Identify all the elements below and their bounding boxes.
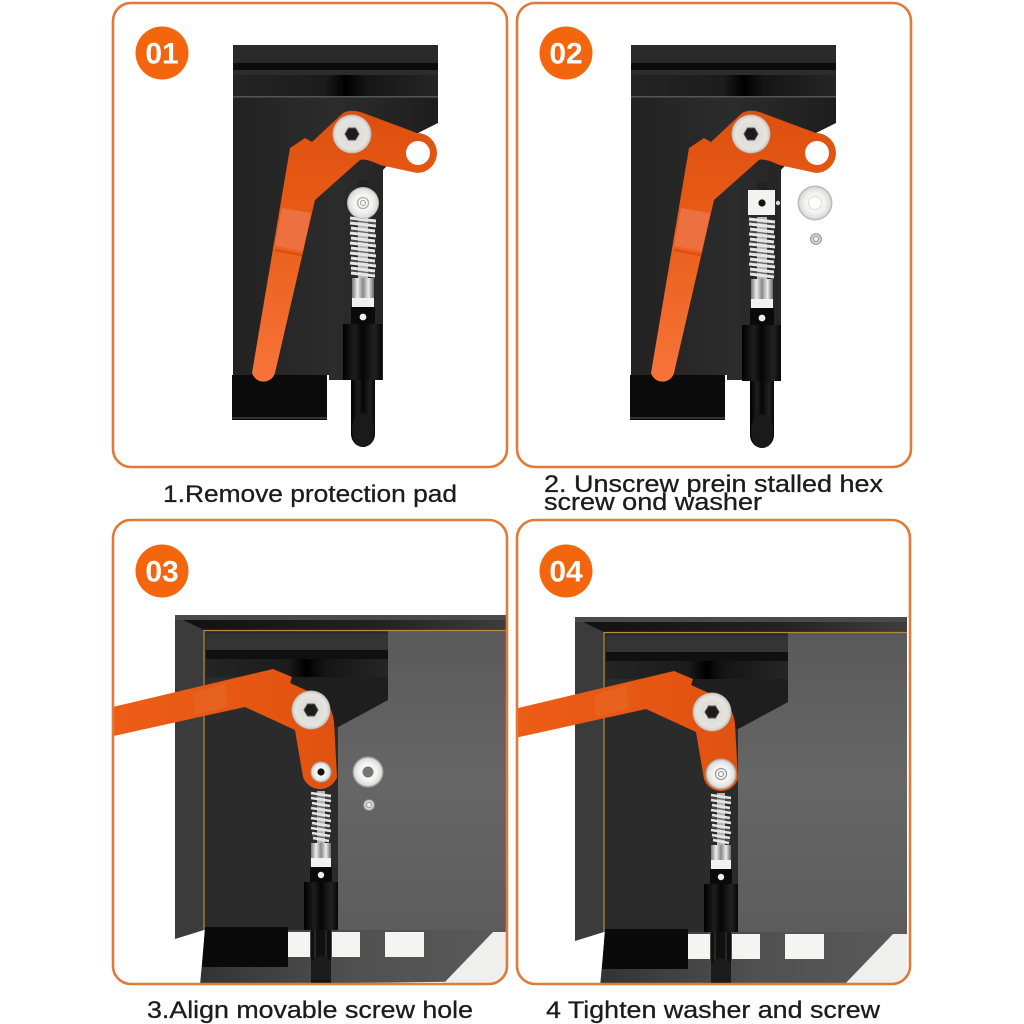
caption 4: 4 Tighten washer and screw [546, 997, 881, 1024]
loose washer [798, 186, 832, 220]
panel: step 3 [100, 520, 507, 990]
loose small screw [810, 234, 822, 244]
badge 02: 02 [549, 38, 583, 70]
panel border 1 [113, 3, 507, 467]
badge 02 [540, 26, 592, 80]
badge 01 [136, 26, 188, 80]
badge 01: 01 [145, 38, 179, 70]
panel: step 4 [501, 520, 910, 992]
caption 1: 1.Remove protection pad [163, 481, 457, 508]
caption 2: screw ond washer [544, 489, 762, 516]
caption 2 [544, 471, 883, 516]
panel border 2 [517, 3, 911, 467]
loose small screw [364, 800, 374, 810]
panel: step 2 [517, 3, 911, 467]
caption 2: 2. Unscrew prein stalled hex [544, 471, 883, 498]
badge 03 [136, 544, 188, 598]
tightened washer and screw [706, 759, 736, 789]
badge 04 [540, 544, 592, 598]
panel: step 1 [113, 3, 507, 467]
panel border 3 [113, 520, 507, 984]
caption 3: 3.Align movable screw hole [147, 997, 473, 1024]
badge 03: 03 [145, 556, 179, 588]
badge 04: 04 [549, 556, 583, 588]
bolt in arm [311, 762, 331, 782]
panel border 4 [517, 520, 910, 984]
loose washer [353, 757, 383, 787]
